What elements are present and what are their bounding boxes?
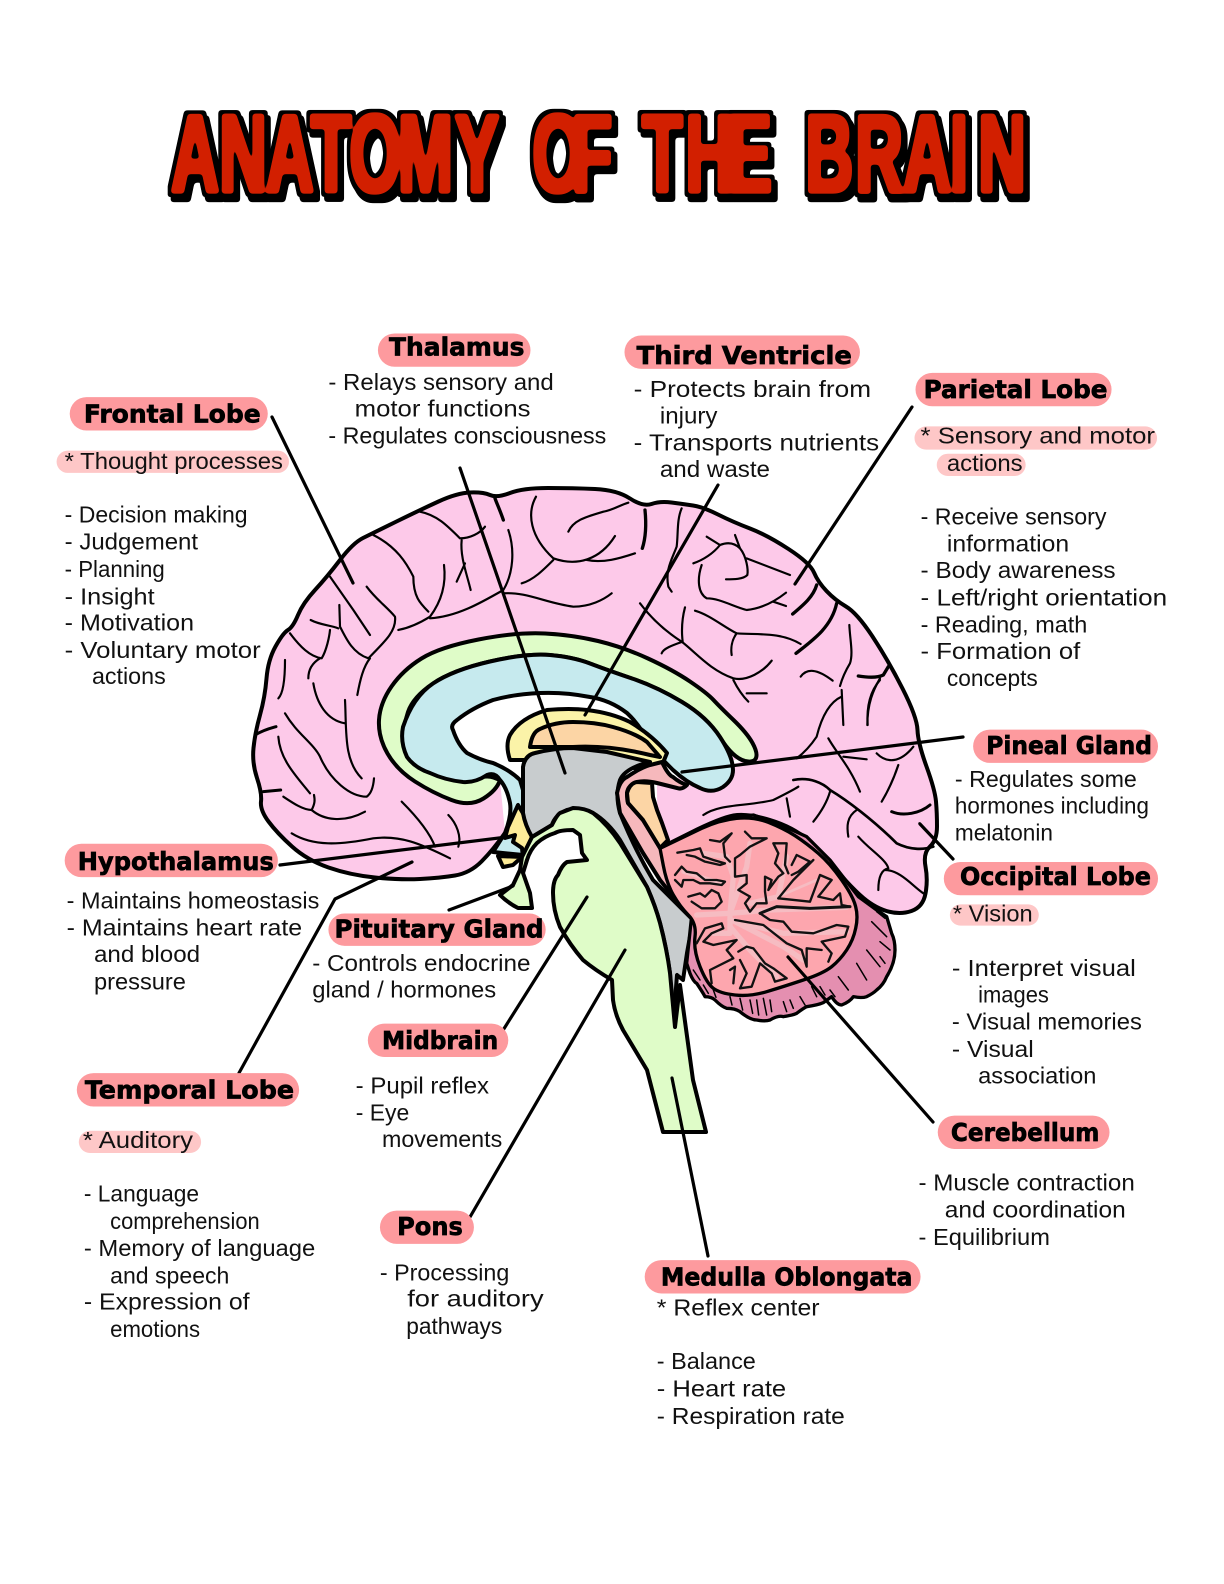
heading: medulla oblongata: Medulla Oblongata xyxy=(661,1262,912,1291)
panel: pituitary gland xyxy=(312,913,546,1002)
text block: temporal lobe functions: and speech xyxy=(110,1262,229,1288)
heading: hypothalamus: Hypothalamus xyxy=(78,847,274,876)
text block: pineal gland functions xyxy=(955,766,1149,846)
highlight: vision: * Vision xyxy=(953,901,1033,927)
panel: temporal lobe xyxy=(77,1073,315,1342)
text block: thalamus functions: - Regulates consciousness xyxy=(328,423,606,449)
text block: hypothalamus functions: - Maintains heart rate xyxy=(67,915,302,941)
text block: cerebellum functions: and coordination xyxy=(945,1197,1126,1223)
text block: midbrain functions: - Pupil reflex xyxy=(356,1072,489,1098)
text block: thalamus functions: motor functions xyxy=(355,395,531,421)
text block: parietal lobe functions: - Reading, math xyxy=(921,612,1087,638)
text block: midbrain functions: - Eye xyxy=(356,1100,409,1126)
panel: hypothalamus xyxy=(65,844,319,994)
text block: temporal lobe functions xyxy=(84,1180,315,1342)
text block: pons functions: for auditory xyxy=(407,1286,544,1312)
text block: occipital lobe functions: - Visual xyxy=(952,1036,1034,1062)
heading: midbrain: Midbrain xyxy=(382,1026,498,1055)
third ventricle xyxy=(402,655,733,855)
highlight: thought processes: * Thought processes xyxy=(65,448,283,474)
tectal plate xyxy=(627,782,668,848)
text block: third ventricle functions xyxy=(634,376,879,482)
text block: medulla oblongata functions: - Heart rate xyxy=(657,1376,786,1402)
text block: parietal lobe functions: concepts xyxy=(947,665,1038,691)
text block: medulla oblongata functions: * Reflex center xyxy=(657,1295,820,1321)
text block: parietal lobe functions: - Left/right orientation xyxy=(921,584,1167,610)
heading: occipital lobe: Occipital Lobe xyxy=(960,862,1151,891)
heading: cerebellum: Cerebellum xyxy=(951,1118,1099,1147)
cerebrum xyxy=(253,488,937,913)
text block: third ventricle functions: - Protects brain from xyxy=(634,376,871,402)
heading: pons: Pons xyxy=(397,1212,463,1241)
title: OF xyxy=(532,93,612,216)
text block: frontal lobe functions: - Judgement xyxy=(65,529,199,555)
text block: pituitary gland functions: gland / hormones xyxy=(312,976,496,1002)
text block: hypothalamus functions: pressure xyxy=(94,968,186,994)
panel: thalamus xyxy=(328,333,606,449)
highlight: sensory and motor actions xyxy=(915,423,1157,476)
text block: hypothalamus functions xyxy=(67,887,319,994)
panel: cerebellum xyxy=(919,1116,1135,1250)
text block: parietal lobe functions: - Receive sensory xyxy=(921,503,1107,529)
label panels xyxy=(57,333,1167,1429)
text block: occipital lobe functions: images xyxy=(978,981,1049,1007)
heading: pituitary gland: Pituitary Gland xyxy=(334,915,544,944)
panel: parietal lobe xyxy=(915,373,1167,691)
panel: midbrain xyxy=(356,1024,508,1152)
panel: frontal lobe xyxy=(57,397,289,689)
corpus callosum xyxy=(379,633,757,803)
heading: thalamus: Thalamus xyxy=(389,333,524,362)
text block: parietal lobe functions xyxy=(921,503,1167,691)
panel: occipital lobe xyxy=(944,862,1158,1088)
text block: medulla oblongata functions xyxy=(657,1295,845,1429)
title xyxy=(171,93,1026,216)
panel: medulla oblongata xyxy=(645,1260,921,1429)
brainstem xyxy=(500,808,706,1132)
thalamus xyxy=(523,748,693,1027)
text block: occipital lobe functions: association xyxy=(978,1062,1096,1088)
heading: pineal gland: Pineal Gland xyxy=(986,731,1152,760)
leader lines xyxy=(239,407,963,1256)
text block: parietal lobe functions: - Body awareness xyxy=(921,557,1116,583)
text block: midbrain functions: movements xyxy=(382,1126,502,1152)
cerebellum cortex xyxy=(687,815,895,1021)
text block: pons functions: - Processing xyxy=(380,1259,509,1285)
text block: occipital lobe functions: - Interpret visual xyxy=(952,955,1136,981)
title: ANATOMY xyxy=(171,93,499,216)
text block: frontal lobe functions: - Insight xyxy=(65,583,155,609)
text block: pituitary gland functions xyxy=(312,950,531,1002)
text block: occipital lobe functions: - Visual memories xyxy=(952,1009,1142,1035)
brain illustration xyxy=(253,488,937,1132)
text block: temporal lobe functions: comprehension xyxy=(110,1208,260,1234)
heading: third ventricle: Third Ventricle xyxy=(637,341,852,370)
hypothalamus xyxy=(498,805,532,867)
text block: frontal lobe functions: - Planning xyxy=(65,556,165,582)
panel: third ventricle xyxy=(624,335,879,482)
heading: frontal lobe: Frontal Lobe xyxy=(84,399,261,428)
text block: third ventricle functions: injury xyxy=(660,402,718,428)
text block: medulla oblongata functions: - Balance xyxy=(657,1348,756,1374)
text block: third ventricle functions: - Transports nutrients xyxy=(634,430,879,456)
highlight: auditory: * Auditory xyxy=(83,1127,193,1153)
title: BRAIN xyxy=(805,93,1026,216)
highlight: sensory and motor actions: actions xyxy=(947,450,1023,476)
text block: medulla oblongata functions: - Respiration rate xyxy=(657,1403,845,1429)
text block: hypothalamus functions: and blood xyxy=(94,941,200,967)
text block: pineal gland functions: melatonin xyxy=(955,820,1053,846)
text block: temporal lobe functions: - Memory of language xyxy=(84,1235,315,1261)
text block: temporal lobe functions: emotions xyxy=(110,1316,200,1342)
fornix xyxy=(508,709,667,770)
text block: midbrain functions xyxy=(356,1072,502,1152)
panel: pons xyxy=(380,1211,544,1339)
text block: cerebellum functions: - Equilibrium xyxy=(919,1224,1050,1250)
lateral ventricle opening xyxy=(452,693,660,780)
panel: pineal gland xyxy=(955,730,1158,846)
heading: temporal lobe: Temporal Lobe xyxy=(85,1075,294,1104)
text block: thalamus functions xyxy=(328,369,606,449)
cerebellum arbor vitae xyxy=(660,818,857,995)
text block: temporal lobe functions: - Language xyxy=(84,1180,199,1206)
text block: frontal lobe functions: actions xyxy=(92,663,166,689)
heading: parietal lobe: Parietal Lobe xyxy=(924,375,1108,404)
text block: cerebellum functions: - Muscle contraction xyxy=(919,1169,1135,1195)
text block: frontal lobe functions: - Decision making xyxy=(65,501,248,527)
text block: pituitary gland functions: - Controls endocrine xyxy=(312,950,531,976)
text block: pineal gland functions: hormones including xyxy=(955,792,1149,818)
text block: third ventricle functions: and waste xyxy=(660,456,770,482)
text block: parietal lobe functions: information xyxy=(947,531,1069,557)
text block: parietal lobe functions: - Formation of xyxy=(921,638,1081,664)
text block: hypothalamus functions: - Maintains homeostasis xyxy=(67,887,319,913)
text block: frontal lobe functions xyxy=(65,501,261,689)
text block: cerebellum functions xyxy=(919,1169,1135,1250)
text block: temporal lobe functions: - Expression of xyxy=(84,1289,250,1315)
thalamic band xyxy=(530,722,660,757)
text block: pons functions: pathways xyxy=(406,1313,502,1339)
text block: frontal lobe functions: - Voluntary motor xyxy=(65,637,261,663)
text block: pineal gland functions: - Regulates some xyxy=(955,766,1137,792)
text block: occipital lobe functions xyxy=(952,955,1142,1088)
highlight: sensory and motor actions: * Sensory and motor xyxy=(921,423,1155,449)
text block: pons functions xyxy=(380,1259,544,1339)
text block: thalamus functions: - Relays sensory and xyxy=(328,369,554,395)
heading: pons xyxy=(380,1211,474,1244)
title: THE xyxy=(642,93,772,216)
pineal region xyxy=(617,762,697,920)
text block: frontal lobe functions: - Motivation xyxy=(65,610,194,636)
